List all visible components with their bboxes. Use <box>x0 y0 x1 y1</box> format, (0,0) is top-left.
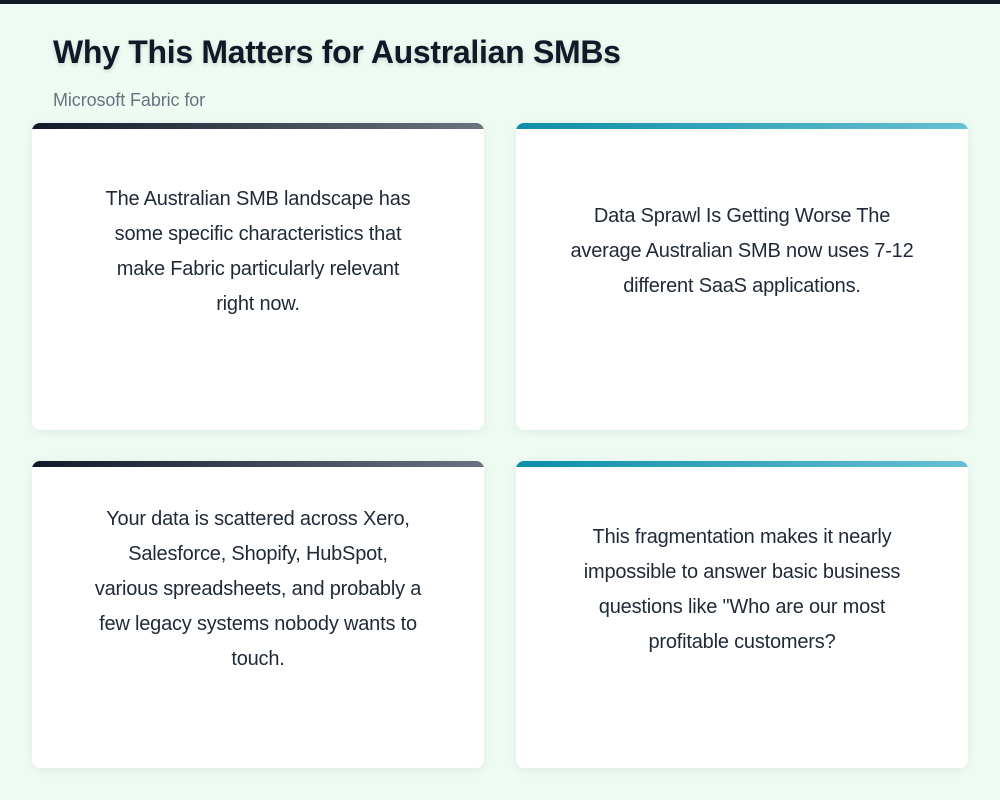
subtitle: Microsoft Fabric for <box>53 90 205 110</box>
panel: scattered data: Your data is scattered across Xero, <box>106 508 410 530</box>
panel: fragmentation <box>516 461 968 768</box>
panel: data sprawl: average Australian SMB now uses 7-12 <box>570 240 914 262</box>
panel: data sprawl: Data Sprawl Is Getting Worse The <box>594 205 890 227</box>
panel: landscape: The Australian SMB landscape has <box>106 188 410 210</box>
panel: landscape: make Fabric particularly relevant <box>117 258 399 280</box>
panel: scattered data: touch. <box>231 648 285 670</box>
panel: fragmentation: This fragmentation makes it nearly <box>593 526 891 548</box>
panel: fragmentation: profitable customers? <box>648 630 836 652</box>
panel: landscape: right now. <box>216 292 300 314</box>
panel: scattered data: few legacy systems nobody wants to <box>99 613 417 635</box>
panel: landscape: some specific characteristics that <box>115 222 401 244</box>
panel: scattered data: Salesforce, Shopify, HubSpot, <box>128 543 388 565</box>
panel: data sprawl: different SaaS applications. <box>623 275 861 297</box>
panel: data sprawl <box>516 123 968 430</box>
panel: landscape <box>32 123 484 430</box>
title: Why This Matters for Australian SMBs <box>53 34 621 70</box>
panel: scattered data: various spreadsheets, and probably a <box>95 578 421 600</box>
panel: fragmentation: questions like "Who are our most <box>599 596 885 618</box>
panel: fragmentation: impossible to answer basic business <box>584 560 900 582</box>
panel: scattered data <box>32 461 484 768</box>
